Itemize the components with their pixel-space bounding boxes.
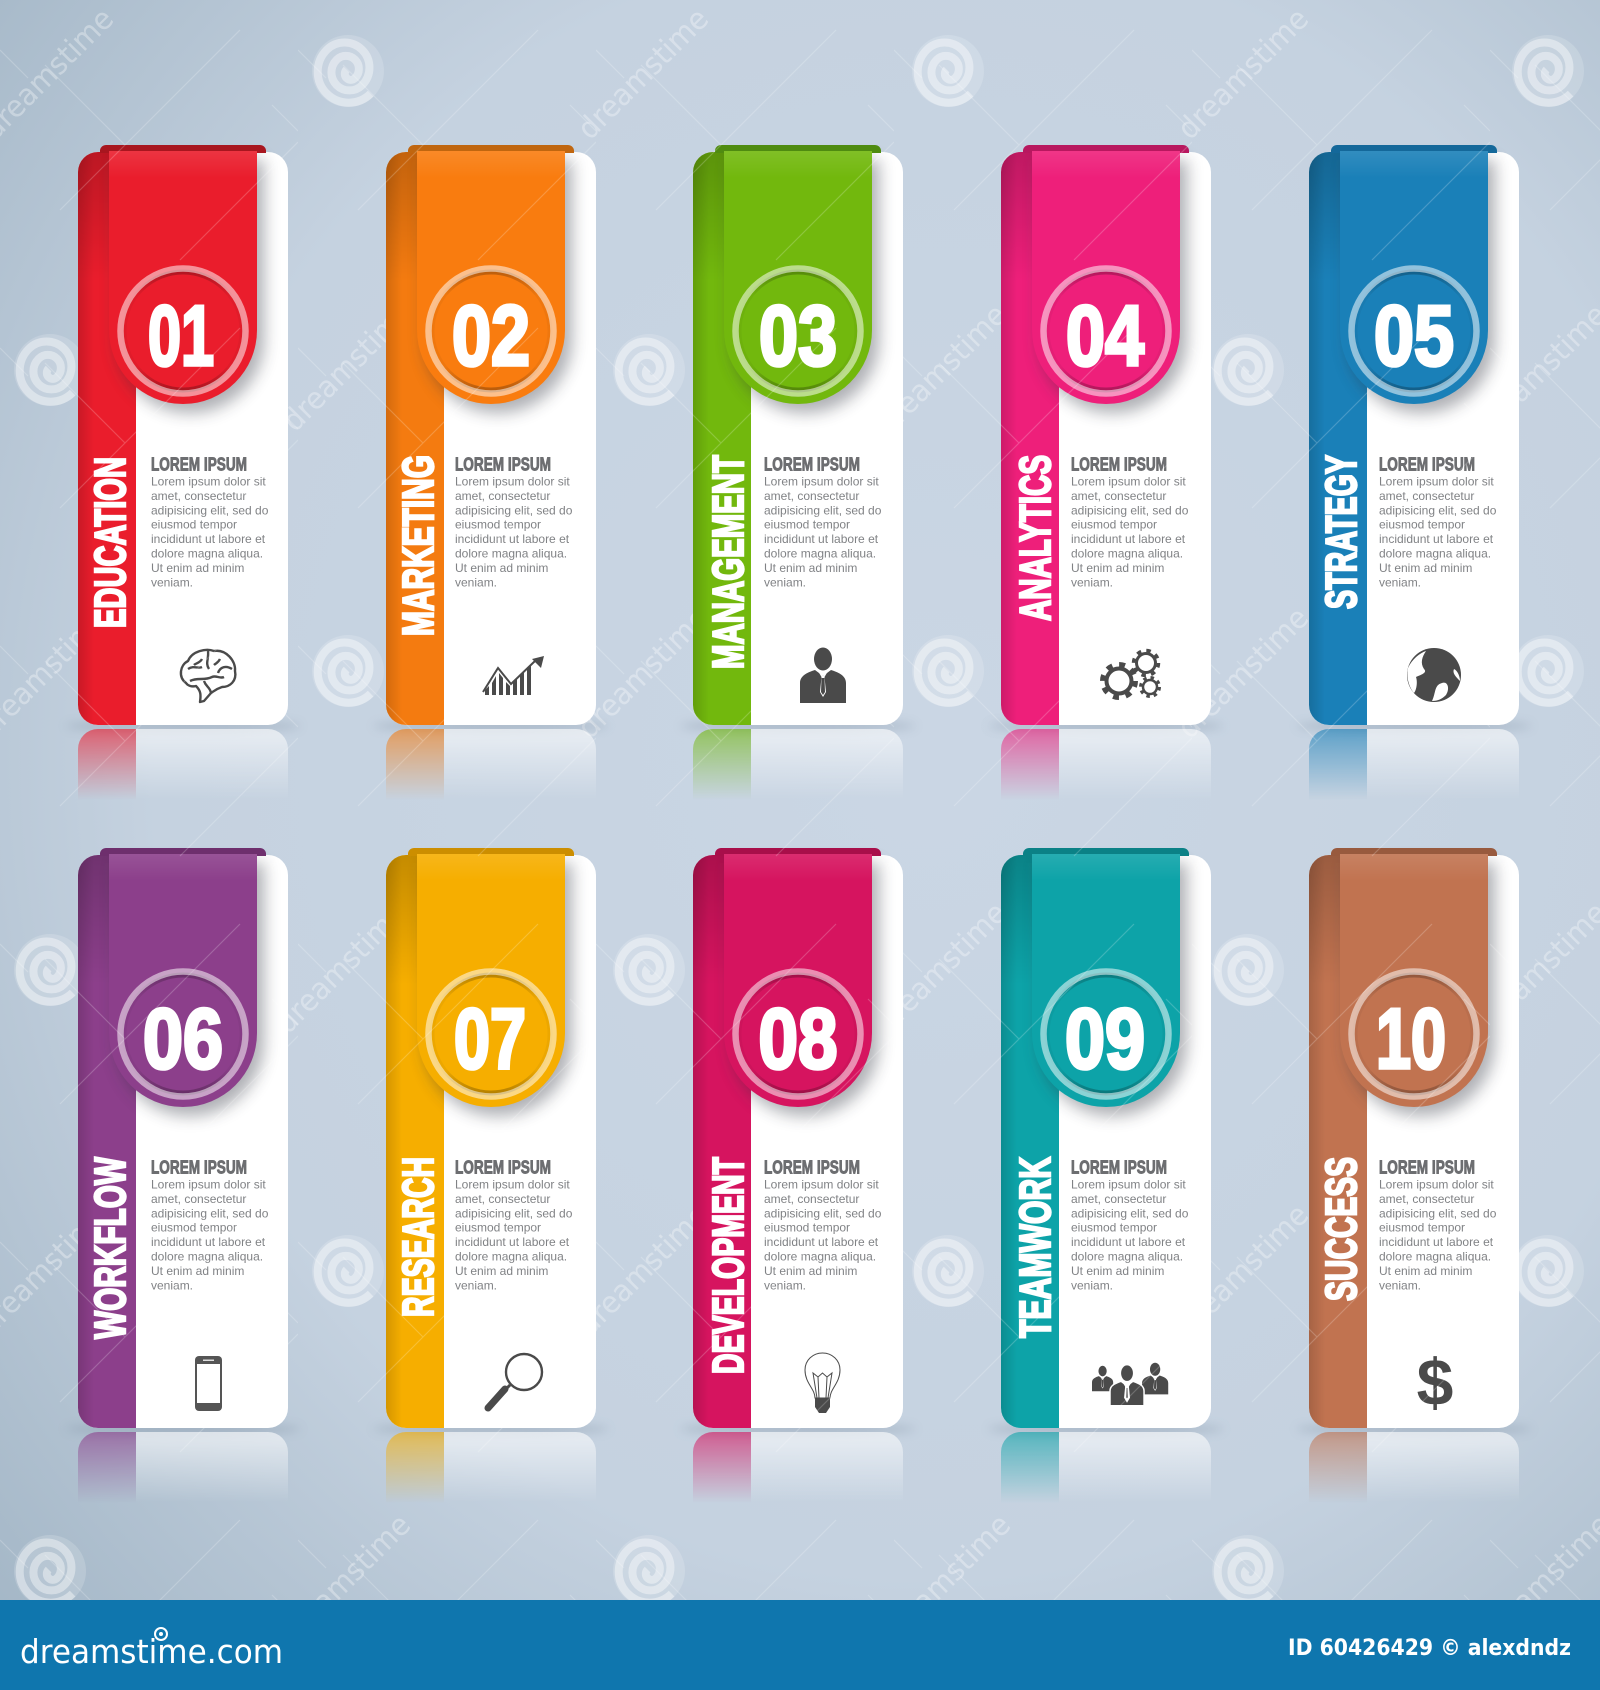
number badge 02: 02: [452, 289, 530, 384]
text block: LOREM IPSUM: [764, 454, 860, 474]
text block: veniam.: [764, 575, 806, 589]
text block: veniam.: [1071, 1278, 1113, 1292]
number badge 06: 06: [143, 992, 223, 1087]
text block: Ut enim ad minim: [455, 561, 548, 575]
text block: eiusmod tempor: [455, 1221, 541, 1235]
number badge 04: 04: [1066, 289, 1144, 384]
number badge 10: 10: [1376, 992, 1446, 1087]
vertical label: ANALYTICS: [1011, 455, 1060, 621]
panel: card 02 marketing: [373, 145, 609, 812]
text block: [151, 1156, 269, 1292]
text block: veniam.: [151, 1278, 193, 1292]
text block: adipisicing elit, sed do: [455, 503, 573, 517]
text block: dolore magna aliqua.: [764, 1250, 876, 1264]
number badge 08: [736, 972, 860, 1096]
text block: adipisicing elit, sed do: [1379, 1206, 1497, 1220]
text block: LOREM IPSUM: [1071, 1156, 1167, 1178]
text block: eiusmod tempor: [764, 518, 850, 532]
number badge 07: 07: [454, 992, 526, 1087]
text block: Lorem ipsum dolor sit: [1071, 474, 1186, 488]
panel: card 01 education: [65, 145, 301, 812]
text block: dolore magna aliqua.: [151, 1250, 263, 1264]
text block: incididunt ut labore et: [764, 1235, 879, 1249]
vertical label: STRATEGY: [1317, 455, 1366, 609]
number badge 01: [120, 268, 246, 394]
icon: globe: [1407, 648, 1461, 702]
footer logo: dreamstime.com: [20, 1632, 283, 1671]
text block: LOREM IPSUM: [1071, 454, 1167, 474]
text block: dolore magna aliqua.: [455, 546, 567, 560]
text block: veniam.: [1071, 575, 1113, 589]
text block: amet, consectetur: [764, 489, 859, 503]
text block: LOREM IPSUM: [151, 1156, 247, 1178]
text block: adipisicing elit, sed do: [1071, 503, 1189, 517]
text block: [1379, 454, 1497, 589]
vertical label: WORKFLOW: [86, 1157, 135, 1339]
panel: card 03 management: [680, 145, 916, 812]
text block: Ut enim ad minim: [1379, 1264, 1472, 1278]
text block: incididunt ut labore et: [1071, 532, 1186, 546]
text block: adipisicing elit, sed do: [1071, 1206, 1189, 1220]
text block: Ut enim ad minim: [1379, 561, 1472, 575]
text block: incididunt ut labore et: [764, 532, 879, 546]
watermark text: dreamstime: [869, 896, 1014, 1041]
footer bar: [0, 1600, 1600, 1690]
text block: LOREM IPSUM: [455, 1156, 551, 1178]
text block: veniam.: [455, 575, 497, 589]
vertical label: MARKETING: [394, 455, 443, 636]
watermark text: dreamstime: [1171, 601, 1316, 746]
text block: Ut enim ad minim: [1071, 1264, 1164, 1278]
watermark text: dreamstime: [869, 298, 1014, 443]
text block: LOREM IPSUM: [1379, 1156, 1475, 1178]
text block: amet, consectetur: [455, 1192, 550, 1206]
text block: dolore magna aliqua.: [1071, 546, 1183, 560]
number badge 01: 01: [148, 289, 214, 384]
text block: incididunt ut labore et: [455, 1235, 570, 1249]
panel: card 08 development: [680, 848, 916, 1515]
watermark text: dreamstime: [1171, 1198, 1316, 1343]
text block: [455, 1156, 573, 1292]
vertical label: MANAGEMENT: [704, 455, 753, 669]
icon: dollar sign: $: [1417, 1345, 1453, 1419]
text block: incididunt ut labore et: [1071, 1235, 1186, 1249]
text block: amet, consectetur: [151, 489, 246, 503]
number badge 09: [1044, 972, 1168, 1096]
watermark text: dreamstime: [571, 601, 716, 746]
text block: eiusmod tempor: [455, 518, 541, 532]
text block: dolore magna aliqua.: [455, 1250, 567, 1264]
text block: adipisicing elit, sed do: [151, 503, 269, 517]
number badge 04: [1044, 268, 1168, 394]
icon: light bulb: [805, 1353, 840, 1413]
text block: amet, consectetur: [1071, 1192, 1166, 1206]
text block: incididunt ut labore et: [151, 532, 266, 546]
text block: eiusmod tempor: [1071, 1221, 1157, 1235]
icon: smartphone: [195, 1356, 222, 1411]
text block: LOREM IPSUM: [764, 1156, 860, 1178]
icon: magnifying glass: [488, 1354, 542, 1408]
text block: amet, consectetur: [151, 1192, 246, 1206]
text block: eiusmod tempor: [764, 1221, 850, 1235]
watermark text: dreamstime: [273, 1508, 418, 1653]
icon: gears: [1102, 650, 1160, 698]
text block: eiusmod tempor: [151, 1221, 237, 1235]
text block: Ut enim ad minim: [455, 1264, 548, 1278]
text block: dolore magna aliqua.: [764, 546, 876, 560]
panel: card 09 teamwork: [988, 848, 1224, 1515]
text block: dolore magna aliqua.: [1071, 1250, 1183, 1264]
text block: Ut enim ad minim: [151, 561, 244, 575]
text block: Ut enim ad minim: [764, 1264, 857, 1278]
text block: Lorem ipsum dolor sit: [764, 1178, 879, 1192]
text block: amet, consectetur: [1379, 489, 1474, 503]
text block: incididunt ut labore et: [1379, 532, 1494, 546]
text block: veniam.: [1379, 1278, 1421, 1292]
text block: amet, consectetur: [455, 489, 550, 503]
number badge 05: [1352, 268, 1476, 394]
vertical label: TEAMWORK: [1011, 1157, 1060, 1338]
number badge 10: [1352, 972, 1476, 1096]
text block: Lorem ipsum dolor sit: [764, 474, 879, 488]
text block: adipisicing elit, sed do: [151, 1206, 269, 1220]
text block: eiusmod tempor: [1379, 518, 1465, 532]
text block: amet, consectetur: [1071, 489, 1166, 503]
text block: adipisicing elit, sed do: [1379, 503, 1497, 517]
watermark text: dreamstime: [269, 896, 414, 1041]
text block: Lorem ipsum dolor sit: [455, 1178, 570, 1192]
text block: amet, consectetur: [764, 1192, 859, 1206]
text block: adipisicing elit, sed do: [764, 1206, 882, 1220]
vertical label: EDUCATION: [86, 457, 135, 628]
text block: incididunt ut labore et: [1379, 1235, 1494, 1249]
number badge 07: [428, 972, 554, 1096]
text block: Lorem ipsum dolor sit: [1379, 474, 1494, 488]
text block: Lorem ipsum dolor sit: [151, 1178, 266, 1192]
text block: [764, 1156, 882, 1292]
number badge 03: 03: [759, 289, 837, 384]
text block: Lorem ipsum dolor sit: [1071, 1178, 1186, 1192]
text block: Lorem ipsum dolor sit: [455, 474, 570, 488]
icon: growth chart: [483, 656, 544, 695]
number badge 09: 09: [1065, 992, 1145, 1087]
text block: eiusmod tempor: [1071, 518, 1157, 532]
text block: adipisicing elit, sed do: [455, 1206, 573, 1220]
text block: [1379, 1156, 1497, 1292]
panel: card 07 research: [373, 848, 609, 1515]
icon: businessman: [800, 648, 846, 703]
text block: Lorem ipsum dolor sit: [1379, 1178, 1494, 1192]
text block: LOREM IPSUM: [1379, 454, 1475, 474]
text block: LOREM IPSUM: [455, 454, 551, 474]
text block: [764, 454, 882, 589]
number badge 06: [120, 972, 246, 1096]
number badge 05: 05: [1374, 289, 1454, 384]
text block: dolore magna aliqua.: [151, 546, 263, 560]
vertical label: DEVELOPMENT: [704, 1157, 753, 1374]
panel: card 06 workflow: [78, 848, 291, 1496]
number badge 08: 08: [758, 992, 838, 1087]
text block: veniam.: [764, 1278, 806, 1292]
text block: incididunt ut labore et: [455, 532, 570, 546]
number badge 02: [428, 268, 554, 394]
text block: incididunt ut labore et: [151, 1235, 266, 1249]
text block: Ut enim ad minim: [1071, 561, 1164, 575]
vertical label: SUCCESS: [1317, 1157, 1366, 1301]
icon: brain: [181, 650, 235, 702]
text block: LOREM IPSUM: [151, 454, 247, 474]
text block: veniam.: [455, 1278, 497, 1292]
text block: [1071, 454, 1189, 589]
text block: amet, consectetur: [1379, 1192, 1474, 1206]
text block: eiusmod tempor: [1379, 1221, 1465, 1235]
text block: Ut enim ad minim: [764, 561, 857, 575]
footer image id: ID 60426429 © alexdndz: [1288, 1636, 1571, 1661]
vertical label: RESEARCH: [394, 1157, 443, 1317]
text block: Ut enim ad minim: [151, 1264, 244, 1278]
watermark text: dreamstime: [873, 1508, 1018, 1653]
text block: adipisicing elit, sed do: [764, 503, 882, 517]
number badge 03: [736, 268, 860, 394]
icon: team: [1092, 1363, 1168, 1406]
watermark text: dreamstime: [276, 294, 421, 439]
text block: [455, 454, 573, 589]
text block: dolore magna aliqua.: [1379, 546, 1491, 560]
panel: card 04 analytics: [988, 145, 1224, 812]
text block: veniam.: [151, 575, 193, 589]
watermark text: dreamstime: [571, 1198, 716, 1343]
text block: veniam.: [1379, 575, 1421, 589]
text block: eiusmod tempor: [151, 518, 237, 532]
panel: card 05 strategy: [1296, 145, 1532, 812]
panel: card 10 success: [1296, 848, 1532, 1515]
text block: [1071, 1156, 1189, 1292]
text block: [151, 454, 269, 589]
text block: dolore magna aliqua.: [1379, 1250, 1491, 1264]
text block: Lorem ipsum dolor sit: [151, 474, 266, 488]
